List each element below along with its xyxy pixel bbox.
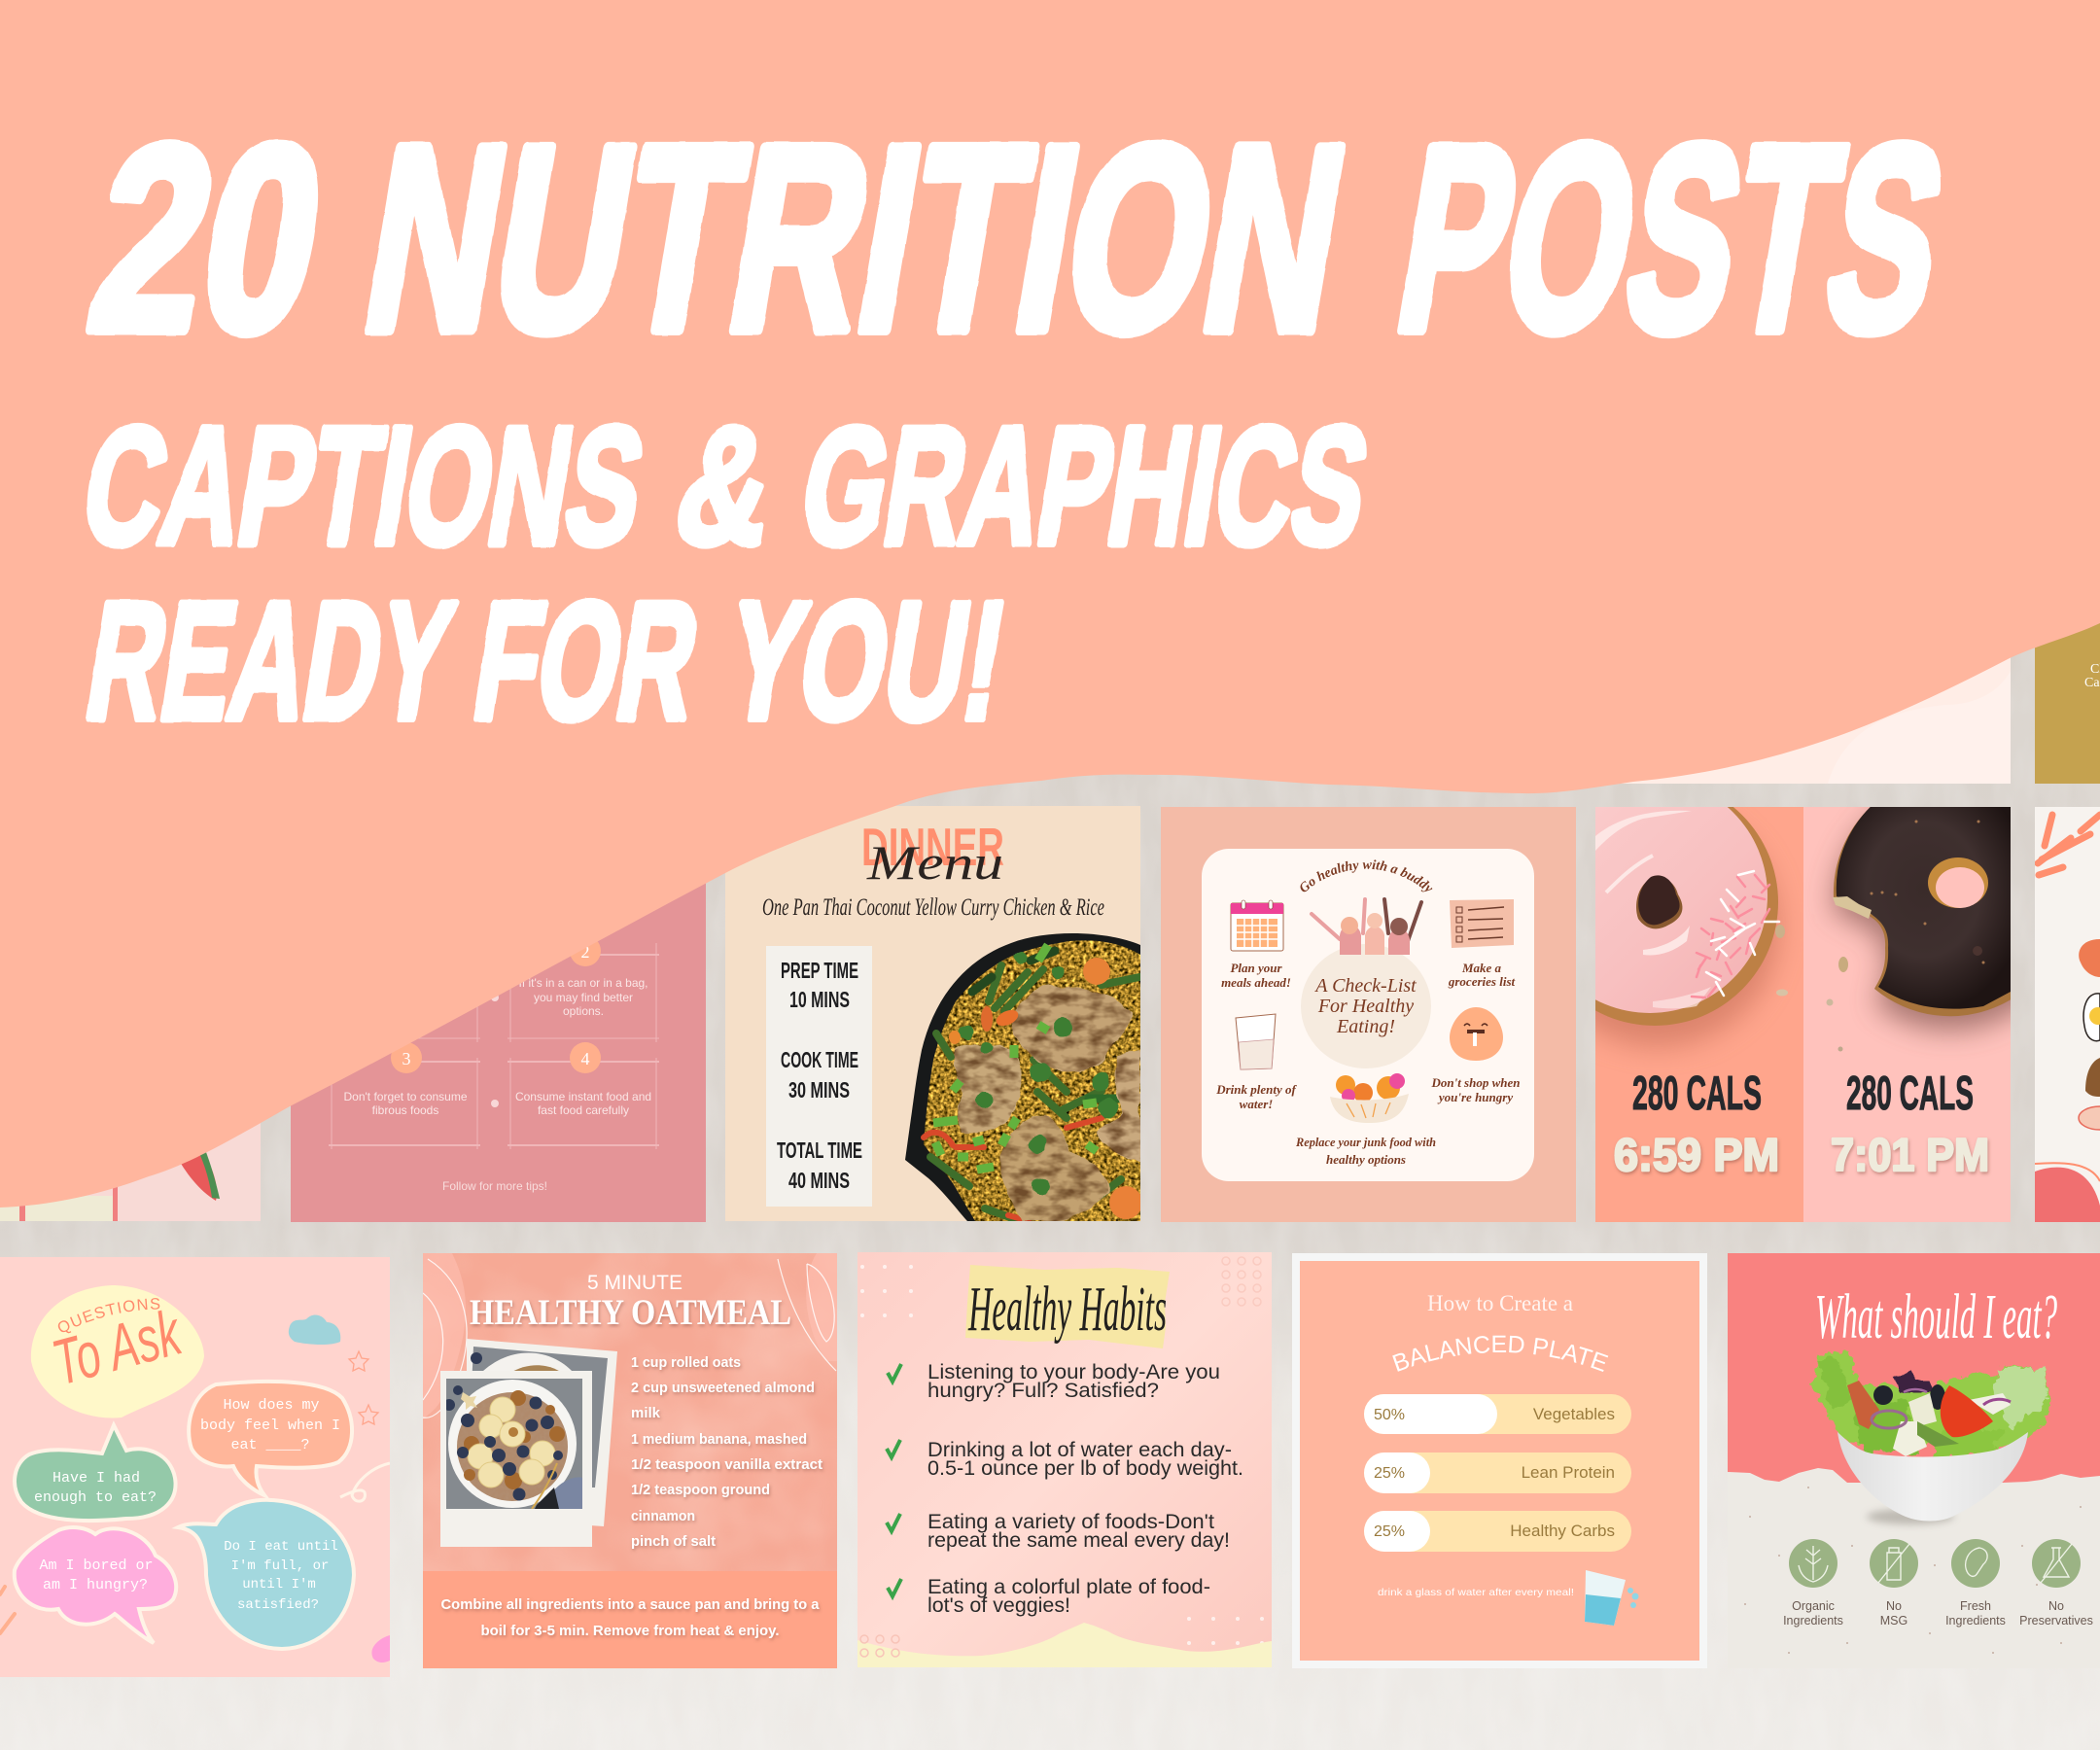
panel: donut comparison post — [1595, 807, 2011, 1222]
time label: 7:01 PM — [1831, 1129, 1989, 1180]
title: 20 nutrition posts: NUTRITION — [347, 91, 1363, 387]
speech bubble: bored or hungry: am I hungry? — [43, 1577, 148, 1593]
bar: healthy carbs 25% — [1364, 1511, 1631, 1552]
icon labels: No — [1886, 1599, 1902, 1613]
icon: glass with drops — [1585, 1570, 1639, 1626]
bar: vegetables 50%: 50% — [1374, 1407, 1405, 1423]
heading: 5 minute: 5 MINUTE — [587, 1272, 682, 1294]
timing panel: 30 MINS — [788, 1077, 850, 1102]
timing panel: COOK TIME — [781, 1047, 858, 1072]
icon labels: Ingredients — [1945, 1614, 2006, 1628]
speech bubble: enough to eat: Have I had — [52, 1470, 140, 1487]
label: replace junk food — [1295, 1135, 1436, 1167]
step number 2 — [570, 935, 601, 966]
bar: lean protein 25%: 25% — [1374, 1465, 1405, 1482]
arc heading: balanced plate: BALANCED PLATE — [1392, 1336, 1608, 1372]
speech bubble: bored or hungry — [15, 1527, 176, 1643]
icon: glass of water — [1236, 1014, 1276, 1069]
subtitle: ready for you: FOR — [463, 567, 711, 754]
icon: checklist note — [1450, 899, 1514, 948]
lettuce back — [1811, 1352, 2049, 1458]
left half: pink donut — [1595, 807, 1803, 1222]
icon: no preservatives — [2032, 1539, 2081, 1588]
checklist item 4 — [888, 1576, 1210, 1617]
ingredient list: 1 medium banana, mashed — [631, 1431, 807, 1448]
panel: healthy habits post — [858, 1252, 1272, 1667]
panel: healthy oatmeal post — [423, 1253, 837, 1668]
checklist item 1: hungry? Full? Satisfied? — [928, 1380, 1159, 1402]
note: drink water: drink a glass of water after every meal! — [1378, 1587, 1574, 1598]
subtitle: captions and graphics: GRAPHICS — [790, 392, 1381, 579]
speech bubble: full or satisfied: I'm full, or — [231, 1558, 329, 1574]
ingredient list: 2 cup unsweetened almond — [631, 1380, 815, 1396]
heading: dinner: DINNER — [861, 817, 1004, 877]
speech bubble: full or satisfied: satisfied? — [237, 1597, 319, 1613]
ingredient list: 1/2 teaspoon vanilla extract — [631, 1456, 822, 1473]
step number 4 — [570, 1042, 601, 1073]
icon: organic ingredients — [1789, 1539, 1838, 1588]
label: groceries: groceries list — [1448, 974, 1516, 989]
tip 4 text: Consume instant food and — [515, 1090, 651, 1103]
icon: calendar — [1231, 900, 1283, 951]
checklist item 1 — [888, 1361, 1220, 1402]
ingredient list: 1/2 teaspoon ground — [631, 1482, 770, 1498]
speech bubble: enough to eat — [15, 1425, 176, 1521]
label: plan meals — [1221, 961, 1291, 990]
speech bubble: body feel: How does my — [223, 1397, 320, 1414]
carrots — [1083, 958, 1110, 985]
center circle with title: Eating! — [1336, 1016, 1395, 1037]
ingredient list: pinch of salt — [631, 1533, 716, 1550]
photo: polaroids of oatmeal — [440, 1339, 617, 1547]
tip 4 text: fast food carefully — [538, 1103, 629, 1117]
method strip: Combine all ingredients into a sauce pan and bring to a — [441, 1596, 820, 1613]
bar: vegetables 50%: Vegetables — [1533, 1405, 1615, 1423]
olives — [1873, 1385, 1893, 1405]
label: replace junk food: healthy options — [1326, 1152, 1406, 1167]
tip 3 text: fibrous foods — [372, 1103, 438, 1117]
label: hungry: you're hungry — [1437, 1090, 1513, 1104]
panel: questions to ask post — [0, 1257, 390, 1677]
scallions — [933, 945, 1097, 1170]
card: first row right food illustration post — [2035, 807, 2100, 1222]
speech bubble: body feel: body feel when I — [200, 1418, 340, 1434]
decorations — [0, 1315, 390, 1662]
icon: hungry egg face — [1450, 1007, 1503, 1061]
heading: healthy oatmeal: HEALTHY OATMEAL — [470, 1293, 791, 1333]
subtitle: captions and graphics — [72, 392, 1381, 579]
label: groceries — [1448, 961, 1516, 989]
icon: fresh ingredients — [1951, 1539, 2000, 1588]
ingredient list: 1 cup rolled oats — [631, 1354, 741, 1371]
torn yellow title tape — [965, 1265, 1170, 1348]
checklist item 3: repeat the same meal every day! — [928, 1529, 1230, 1552]
card: first row left post — [0, 1069, 261, 1221]
checklist item 3: Eating a variety of foods-Don't — [928, 1511, 1214, 1533]
time label: 6:59 PM — [1614, 1129, 1779, 1180]
speech bubble: full or satisfied — [178, 1500, 354, 1649]
tip 3 text: Don't forget to consume — [343, 1090, 468, 1103]
ingredient list: cinnamon — [631, 1508, 695, 1524]
ingredient list — [631, 1354, 822, 1550]
checklist item 2: 0.5-1 ounce per lb of body weight. — [928, 1457, 1243, 1480]
icon labels: Preservatives — [2019, 1614, 2093, 1628]
calories label: 280 CALS — [1632, 1068, 1762, 1120]
label: groceries: Make a — [1461, 961, 1502, 975]
yellow title blob — [31, 1285, 204, 1418]
right half: chocolate donut — [1803, 807, 2011, 1222]
recipe title: One Pan Thai Coconut Yellow Curry Chicken & Rice — [762, 894, 1104, 921]
checklist item 4: Eating a colorful plate of food- — [928, 1576, 1210, 1598]
ingredient list: milk — [631, 1405, 661, 1421]
timing panel: 40 MINS — [788, 1168, 850, 1193]
bowl — [1838, 1432, 2028, 1521]
tomato — [1941, 1385, 1993, 1437]
bacon — [1847, 1381, 1879, 1429]
speech bubble: body feel: eat ____? — [230, 1437, 310, 1453]
speech bubble: full or satisfied: until I'm — [242, 1577, 316, 1592]
checklist item 2: Drinking a lot of water each day- — [928, 1439, 1232, 1461]
method strip: boil for 3-5 min. Remove from heat & enjoy. — [480, 1623, 780, 1639]
subtitle: ready for you — [76, 567, 1018, 754]
tip 2 text — [518, 976, 648, 1018]
label: plan meals: meals ahead! — [1221, 975, 1291, 990]
step number 4: 4 — [581, 1049, 589, 1068]
heading: menu script: Menu — [866, 835, 1003, 890]
label: drink water: water! — [1240, 1097, 1273, 1111]
onion rings — [1872, 1411, 1907, 1428]
center circle with title: For Healthy — [1317, 996, 1414, 1017]
subtitle: captions and graphics: CAPTIONS — [72, 392, 656, 579]
sprinkles — [1692, 875, 1769, 998]
panel: what should I eat post — [1728, 1253, 2100, 1668]
timing panel: 10 MINS — [789, 987, 850, 1012]
peppers — [924, 1118, 1102, 1221]
label: drink water — [1215, 1082, 1297, 1111]
icon labels: Fresh — [1960, 1599, 1991, 1613]
hole — [1636, 877, 1682, 928]
tip 2 text: options. — [563, 1004, 604, 1018]
arc text: go healthy: Go healthy with a buddy — [1301, 859, 1433, 892]
icon labels: Ingredients — [1783, 1614, 1843, 1628]
step number 3: 3 — [402, 1049, 410, 1068]
panel: balanced plate post — [1292, 1253, 1707, 1668]
bar: lean protein 25%: Lean Protein — [1522, 1463, 1615, 1482]
checklist item 4: lot's of veggies! — [928, 1594, 1070, 1617]
checklist item 3 — [887, 1511, 1230, 1552]
icon: chili pepper — [176, 1136, 220, 1201]
footer text: Follow for more tips! — [442, 1179, 547, 1193]
panel: tips post — [291, 807, 706, 1222]
tip 2 text: If it's in a can or in a bag, — [518, 976, 648, 990]
label: replace junk food: Replace your junk food with — [1295, 1135, 1436, 1149]
chicken pieces — [955, 986, 1140, 1221]
speech bubble: bored or hungry: Am I bored or — [39, 1558, 154, 1574]
icon: food bowl — [1330, 1073, 1409, 1123]
speech bubble: full or satisfied: Do I eat until — [224, 1539, 338, 1555]
subtitle: captions and graphics: & — [665, 392, 787, 579]
title: 20 nutrition posts: 20 — [74, 91, 342, 387]
bar: healthy carbs 25%: 25% — [1374, 1523, 1405, 1540]
orange wave banner — [0, 0, 2100, 1208]
icon labels — [1783, 1599, 2093, 1628]
subtitle: ready for you: YOU! — [716, 567, 1018, 754]
label: drink water: Drink plenty of — [1215, 1082, 1297, 1097]
icon labels: MSG — [1880, 1614, 1908, 1628]
step number 2: 2 — [581, 942, 589, 962]
cucumber — [1917, 1421, 1959, 1447]
timing panel: TOTAL TIME — [777, 1138, 862, 1163]
calories label: 280 CALS — [1846, 1068, 1974, 1120]
icon labels: Organic — [1792, 1599, 1835, 1613]
bar: healthy carbs 25%: Healthy Carbs — [1510, 1522, 1615, 1540]
tip 2 text: you may find better — [534, 991, 633, 1004]
step number 3 — [391, 1042, 422, 1073]
timing panel: PREP TIME — [781, 958, 858, 983]
center circle with title: A Check-List — [1313, 975, 1417, 997]
purple lettuce — [1893, 1371, 1935, 1392]
tip 3 text — [343, 1090, 468, 1117]
speech bubble: body feel — [189, 1382, 352, 1495]
photo: salad bowl — [1811, 1352, 2049, 1524]
heading: how to create: How to Create a — [1427, 1291, 1573, 1315]
feta cubes — [1908, 1393, 1937, 1427]
cilantro — [958, 951, 1118, 1195]
center circle with title — [1301, 944, 1431, 1068]
tip 4 text — [515, 1090, 651, 1117]
checklist item 2 — [887, 1439, 1243, 1480]
panel: healthy eating checklist post — [1161, 807, 1576, 1222]
icon: no msg — [1870, 1539, 1918, 1588]
label: hungry: Don't shop when — [1430, 1075, 1521, 1090]
panel: dinner menu post — [725, 806, 1142, 1221]
arc text: questions: QUESTIONS — [58, 1298, 159, 1334]
timing panel — [766, 946, 872, 1207]
icon: people cheering — [1312, 899, 1421, 955]
bar: vegetables 50% — [1364, 1394, 1631, 1434]
subtitle: ready for you: READY — [76, 567, 465, 754]
card: top row right pale post — [1517, 583, 2011, 784]
label: plan meals: Plan your — [1230, 961, 1282, 975]
green beans — [930, 951, 1139, 1220]
photo: curry skillet — [905, 933, 1142, 1221]
torn yellow footer — [858, 1623, 1272, 1667]
label: hungry — [1430, 1075, 1521, 1104]
card: top row gold post — [2035, 583, 2100, 784]
icon labels: No — [2048, 1599, 2064, 1613]
bar: lean protein 25% — [1364, 1452, 1631, 1493]
script: to ask: To Ask — [45, 1295, 190, 1399]
checklist item 1: Listening to your body-Are you — [928, 1361, 1220, 1383]
dot patterns — [860, 1257, 1264, 1645]
method strip — [423, 1571, 837, 1668]
heading: healthy habits: Healthy Habits — [967, 1274, 1167, 1345]
speech bubble: enough to eat: enough to eat? — [34, 1489, 157, 1506]
